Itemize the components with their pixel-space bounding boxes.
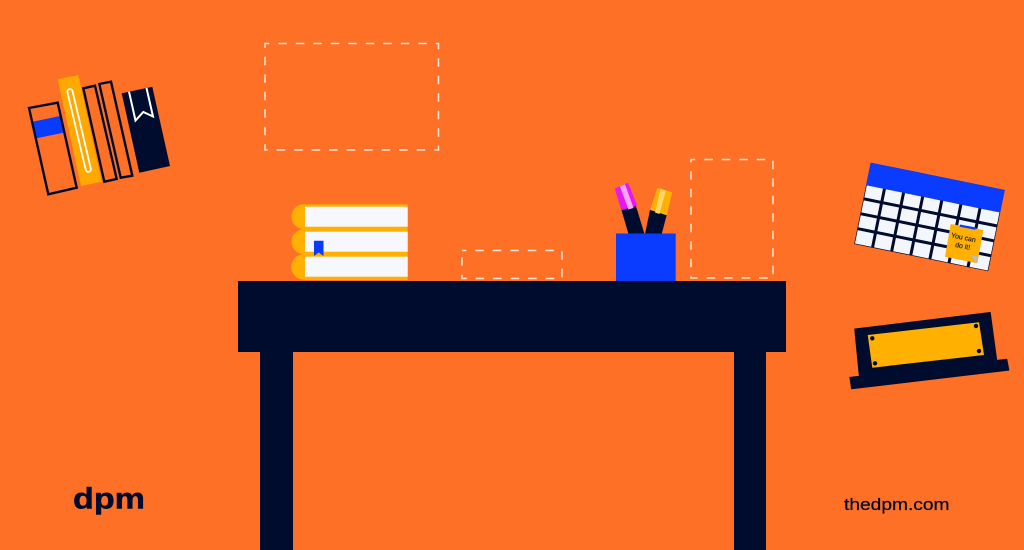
website address: thedpm.com [844, 495, 950, 514]
dashed placeholder: top frame [265, 44, 438, 150]
bookmark [314, 241, 324, 256]
desk top [238, 281, 786, 352]
book spines [291, 204, 408, 280]
book pages [305, 207, 408, 277]
calendar day cells [855, 185, 999, 270]
yellow book [58, 75, 102, 186]
dashed placeholder: desk frame [462, 250, 562, 278]
yellow marker [645, 189, 671, 234]
thin outlined book [83, 86, 117, 182]
second thin outlined book [99, 82, 132, 178]
plaque back [855, 313, 997, 380]
right desk leg [734, 352, 766, 550]
pen cup with markers [616, 184, 676, 281]
calendar sheet [854, 163, 1005, 271]
pink marker [616, 184, 644, 234]
calendar header [866, 163, 1005, 213]
blue cup [616, 234, 676, 281]
desk name plaque [850, 313, 1009, 389]
stack of books on desk [291, 204, 408, 280]
plaque base [850, 359, 1009, 389]
sticky note folded corner [970, 256, 977, 263]
row of books icon [29, 75, 170, 194]
plate screws [870, 324, 981, 365]
sticky note text: You can [950, 232, 976, 244]
dpm logo: dpm [73, 482, 145, 516]
sticky note text: do it! [954, 242, 971, 252]
dashed placeholder: tall frame [691, 160, 773, 278]
sticky note [945, 224, 983, 263]
outlined book with blue band [29, 103, 77, 194]
desk [238, 281, 786, 550]
left desk leg [260, 352, 293, 550]
calendar with sticky note [854, 163, 1005, 271]
sticky note clip [960, 224, 976, 230]
dark book with ribbon [122, 87, 170, 173]
gold plate [868, 322, 984, 368]
